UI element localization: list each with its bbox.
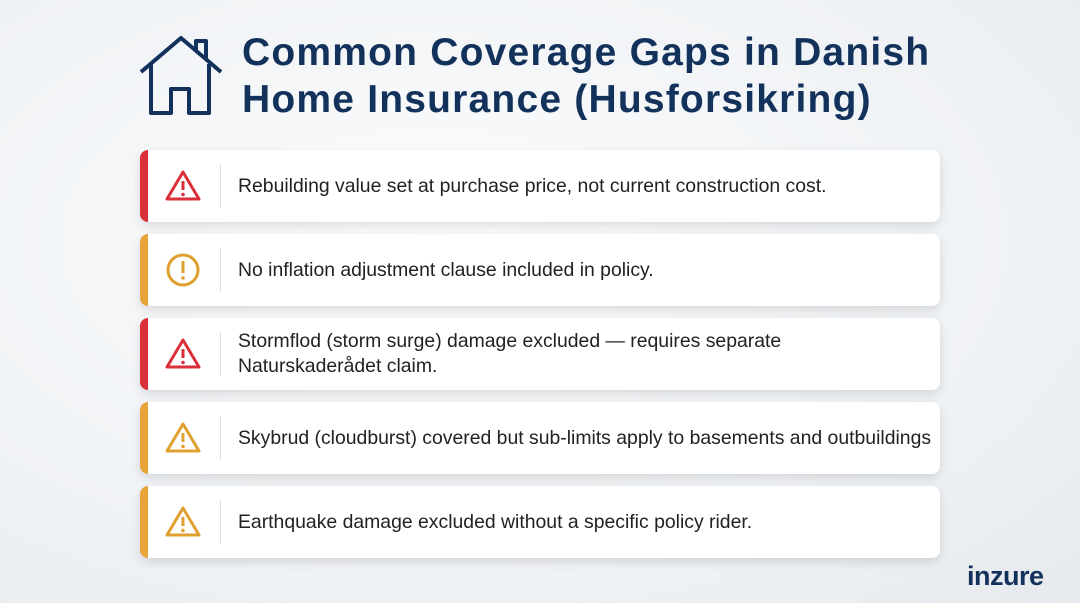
title: Home Insurance (Husforsikring): [242, 78, 872, 121]
icon: warning orange: [166, 422, 201, 452]
card 3: Stormflod (storm surge) damage excluded — requires separate: [238, 330, 781, 352]
icon: exclamation circle: [166, 254, 200, 286]
card 4: Skybrud (cloudburst) covered but sub-limits apply to basements and outbuildings: [238, 426, 931, 448]
card 4: [140, 402, 940, 474]
title: Common Coverage Gaps in Danish: [242, 31, 930, 74]
card 1: [140, 150, 940, 222]
card 2: No inflation adjustment clause included in policy.: [238, 258, 654, 280]
logo: inzure: [967, 561, 1044, 591]
card 2: [140, 234, 940, 306]
card 1: Rebuilding value set at purchase price, not current construction cost.: [238, 174, 826, 196]
card 5: [140, 486, 940, 558]
icon: warning red: [166, 338, 201, 368]
card 3: Naturskaderådet claim.: [238, 355, 437, 377]
icon: house: [140, 36, 222, 115]
icon: warning orange: [166, 506, 201, 536]
title: [242, 31, 930, 121]
card 3: [140, 318, 940, 390]
card 5: Earthquake damage excluded without a specific policy rider.: [238, 510, 752, 532]
icon: warning red: [166, 170, 201, 200]
